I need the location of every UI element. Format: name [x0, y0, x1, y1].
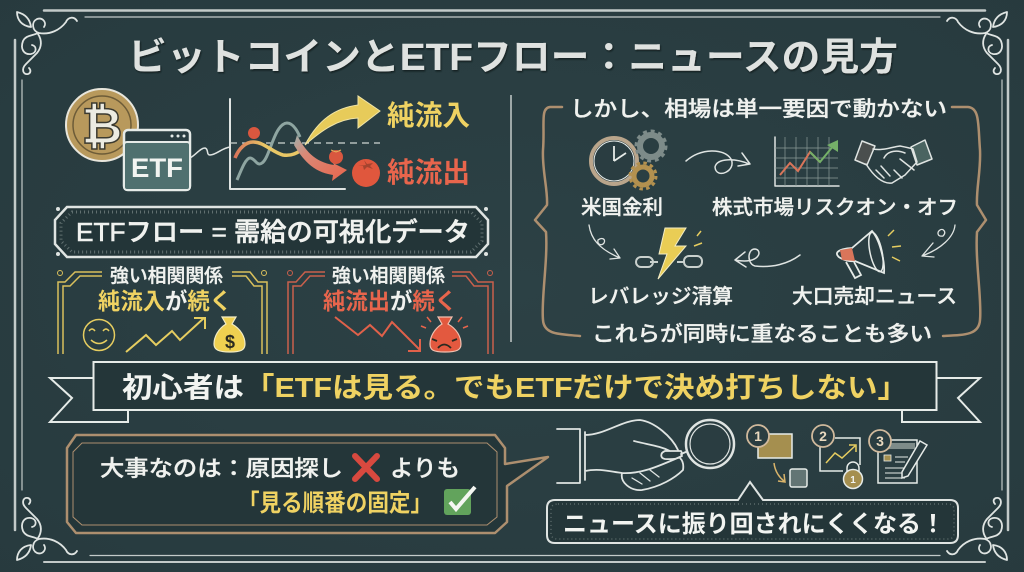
icon: stock chart: [775, 137, 839, 186]
icon: clock and gears: [591, 131, 666, 189]
step 1: folder to document: 1: [754, 428, 762, 444]
icon: tomato: [352, 159, 380, 187]
step 2: chart and lock: [812, 425, 862, 488]
label: net outflow: 純流出: [387, 157, 470, 188]
icon: money bag: $: [225, 332, 235, 352]
panel: sustained outflow: 純流出が続く: [323, 288, 457, 314]
banner: key message: 初心者は 「ETFは見る。でもETFだけで決め打ちしない」: [122, 372, 908, 403]
icon: sad money bag: [421, 317, 468, 352]
arrow: news to leverage: [735, 249, 800, 267]
icon: rising zigzag arrow: [126, 318, 205, 352]
icon: smiley: [84, 320, 114, 350]
step 2: chart and lock: 2: [819, 428, 827, 444]
icon: ETF window: ETF: [131, 153, 183, 183]
icon: cross mark: [355, 456, 377, 479]
callout: fix the viewing order: 「見る順番の固定」: [238, 490, 432, 517]
panel: sustained inflow: [58, 265, 267, 354]
steps: viewing order: [747, 425, 927, 488]
callout: less swayed by news: ニュースに振り回されにくくなる！: [563, 511, 945, 538]
divider between upper panels: [510, 95, 512, 342]
panel: sustained inflow: 純流入が続く: [98, 288, 232, 314]
icon: bitcoin coin: ₿: [82, 98, 122, 154]
closing note: これらが同時に重なることも多い: [592, 323, 932, 346]
step 3: checklist and pencil: [869, 430, 927, 483]
icon: hand with magnifying glass: [557, 420, 734, 490]
icon: check mark: [444, 487, 475, 515]
step 3: checklist and pencil: 3: [876, 433, 884, 449]
label: large sale news: 大口売却ニュース: [792, 285, 957, 308]
label: US rates: 米国金利: [581, 196, 663, 219]
plaque: ETF flow definition: ETFフロー = 需給の可視化データ: [76, 217, 470, 247]
callout: fix the viewing order: 大事なのは：原因探し: [100, 456, 343, 481]
callout: fix the viewing order: [67, 435, 548, 533]
arrow: rates to equities: [686, 151, 750, 173]
arrow: net inflow: [305, 96, 380, 145]
panel: ETF flow overview: [55, 89, 493, 354]
arrow: net outflow: [294, 135, 347, 181]
brown bracket frame: [535, 107, 986, 336]
icon: handshake: [855, 140, 932, 183]
icon: megaphone: [837, 230, 901, 278]
plaque: ETF flow definition: [55, 207, 488, 257]
panel: sustained outflow: [288, 265, 493, 354]
connector line: [190, 147, 230, 158]
label: leverage liquidation: レバレッジ清算: [588, 285, 733, 308]
icon: falling zigzag arrow: [335, 317, 420, 351]
arrow: equities to news: [922, 225, 955, 257]
label: net inflow: 純流入: [387, 100, 470, 131]
callout: less swayed by news: [547, 482, 958, 543]
panel: multiple market factors: [535, 98, 986, 346]
banner: key message: [50, 362, 980, 422]
icon: ETF window: [124, 130, 190, 190]
callout: fix the viewing order: よりも: [390, 455, 460, 481]
flow line chart: [230, 99, 380, 189]
panel: sustained inflow: 強い相関関係: [110, 265, 223, 287]
icon: lightning and broken chain: [636, 228, 702, 279]
step 1: folder to document: [747, 425, 807, 487]
heading: しかし、相場は単一要因で動かない: [570, 98, 947, 121]
icon: money bag: [214, 317, 245, 352]
label: equity risk on off: 株式市場リスクオン・オフ: [712, 196, 958, 219]
icon: bitcoin coin: [66, 89, 138, 161]
title: ビットコインとETFフロー：ニュースの見方: [128, 37, 898, 79]
panel: sustained outflow: 強い相関関係: [332, 265, 445, 287]
arrow: rates to leverage: [589, 225, 620, 259]
step 2: chart and lock: 1: [850, 475, 856, 486]
